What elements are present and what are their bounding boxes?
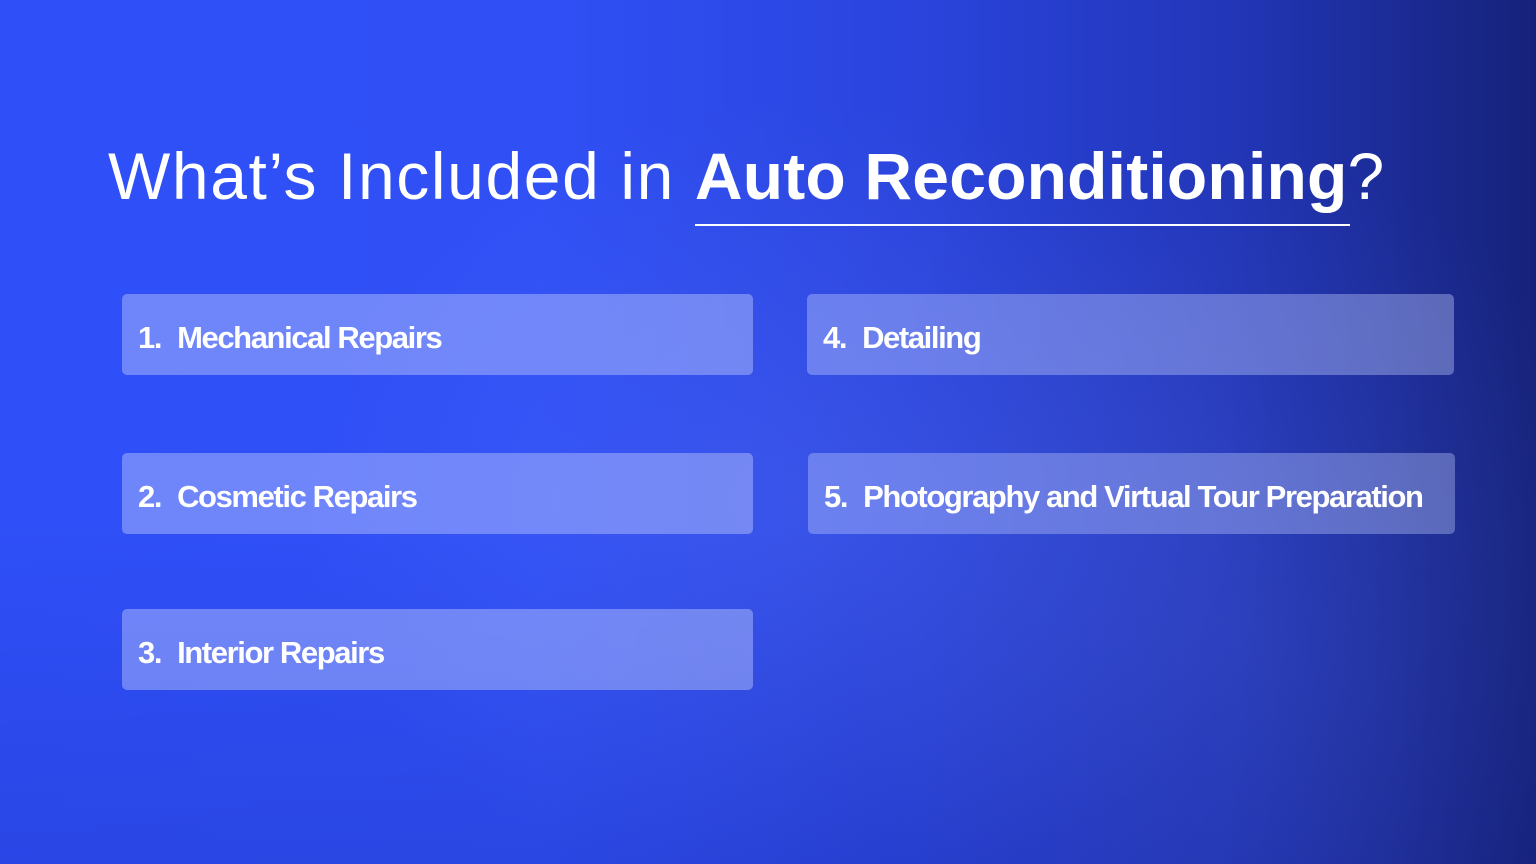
item 5: 5. — [824, 478, 847, 514]
item 3: Interior Repairs — [177, 634, 384, 670]
item 3 — [122, 609, 753, 690]
item 2 — [122, 453, 753, 534]
item 2: 2. — [138, 478, 161, 514]
item 1 — [122, 294, 753, 375]
item 4 — [807, 294, 1454, 375]
item 5 — [808, 453, 1455, 534]
title: What’s Included in Auto Reconditioning? — [108, 139, 1386, 213]
item 4: Detailing — [862, 320, 980, 354]
item 3: 3. — [138, 634, 161, 670]
item 4: 4. — [823, 320, 846, 354]
item 1: Mechanical Repairs — [177, 320, 441, 354]
item 2: Cosmetic Repairs — [177, 478, 417, 514]
title underline — [695, 224, 1350, 226]
item 1: 1. — [138, 320, 161, 354]
item 5: Photography and Virtual Tour Preparation — [863, 478, 1423, 514]
